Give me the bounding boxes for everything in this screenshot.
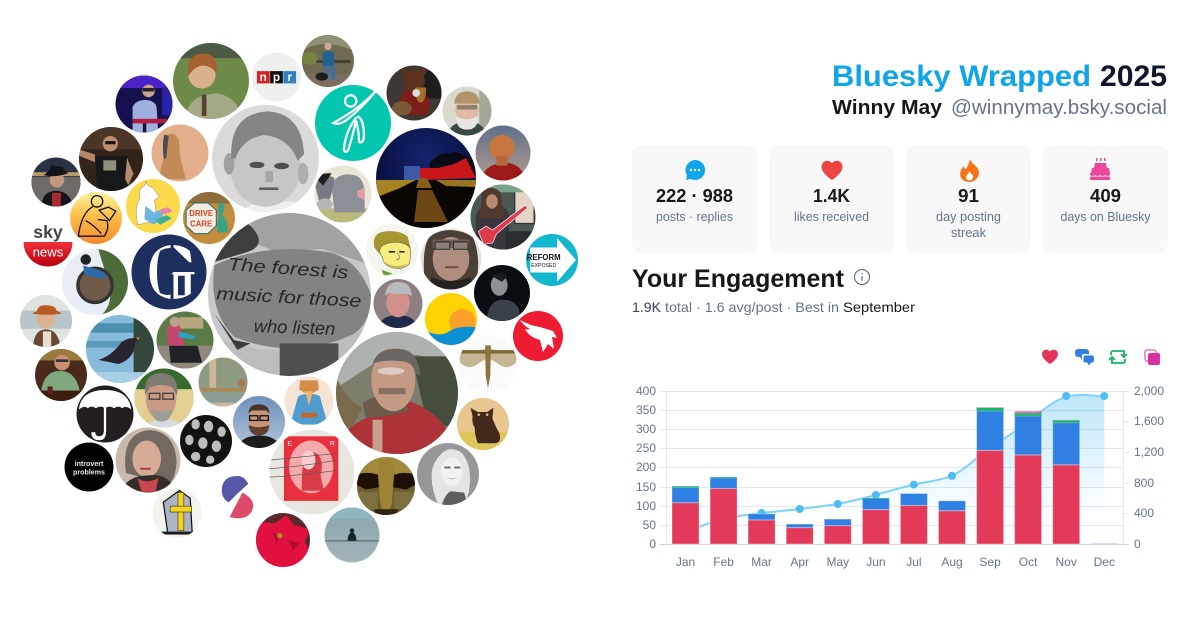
left axis labels: 50 [643, 518, 656, 532]
avatar: Queen Elizabeth red postage stamp: R [330, 441, 335, 448]
right axis labels: 400 [1134, 506, 1154, 520]
avatar: orange cat in kimono [284, 376, 334, 426]
month labels: Mar [751, 555, 772, 569]
left axis labels: 350 [636, 403, 656, 417]
avatar: Introvert Problems logo: problems [73, 468, 105, 476]
avatar: Sky News logo: news [33, 245, 64, 260]
engagement chart [636, 384, 1164, 569]
avatar: person in ornate room [198, 358, 248, 406]
avatar cluster [20, 35, 578, 567]
engagement summary: September [843, 299, 915, 315]
panel: days on Bluesky [1043, 145, 1168, 253]
icon: quotes [1145, 350, 1160, 365]
avatar: NPR logo [252, 52, 301, 102]
left axis labels: 300 [636, 422, 656, 436]
left axis labels: 400 [636, 384, 656, 398]
month labels: Sep [979, 555, 1001, 569]
icon: likes [1042, 350, 1058, 364]
user name and handle: @winnymay.bsky.social [951, 97, 1167, 119]
avatar: Sky News logo: sky [33, 222, 63, 242]
avatar: man looking up in red jacket [336, 332, 458, 454]
icon: birthday cake [1090, 158, 1110, 180]
right axis labels: 0 [1134, 537, 1141, 551]
month labels: Oct [1019, 555, 1038, 569]
month labels: Jun [866, 555, 886, 569]
avatar: red castle at night with lights [376, 128, 476, 228]
month labels: May [826, 555, 849, 569]
month labels: Apr [790, 555, 809, 569]
avatar: Queen Elizabeth red postage stamp: E [287, 441, 292, 448]
avatar: man in cowboy hat [32, 158, 80, 206]
title: Bluesky Wrapped [832, 60, 1091, 93]
avatar: man in black t-shirt [79, 127, 143, 191]
avatar: reader silhouette on orange [70, 192, 122, 244]
avatar: Independent eagle logo [513, 311, 563, 361]
avatar: teal dancer logo [315, 85, 391, 161]
right axis labels: 1,600 [1134, 414, 1164, 428]
avatar: Queen Elizabeth red postage stamp [270, 430, 354, 514]
header [832, 60, 1167, 119]
user name and handle [832, 97, 1167, 119]
avatar: person at keyboard [116, 76, 172, 132]
avatar: black and white group photo [180, 415, 232, 467]
avatar: Eeyore [314, 166, 372, 222]
panel: likes received: likes received [794, 209, 869, 224]
left axis labels: 100 [636, 499, 656, 513]
engagement summary [632, 299, 915, 315]
avatar: Introvert Problems logo [64, 442, 114, 492]
avatar: cartoon yellow face [366, 224, 418, 276]
avatar: woman on mobility scooter [156, 312, 214, 368]
panel: days on Bluesky: 409 [1090, 186, 1121, 206]
left axis labels: 0 [649, 537, 656, 551]
avatar: swimmer at sea [324, 508, 380, 562]
avatar: Drive to Care sign [183, 192, 235, 244]
panel: days on Bluesky: days on Bluesky [1060, 209, 1151, 224]
icon: info [854, 270, 870, 284]
avatar: Drive to Care sign: CARE [190, 219, 212, 228]
avatar: Reform Exposed logo: REFORM [527, 253, 561, 262]
avatar: Drive to Care sign: DRIVE [189, 209, 213, 218]
avatar: grey haired man selfie [374, 279, 422, 328]
month labels: Dec [1094, 555, 1115, 569]
avatar: NPR logo: r [287, 71, 292, 84]
icon: reposts [1109, 351, 1127, 363]
month labels: Jul [906, 555, 922, 569]
avatar: big stone with carved text [208, 213, 371, 376]
month labels: Feb [713, 555, 734, 569]
right axis labels [1134, 384, 1164, 551]
avatar: guitarist [470, 184, 536, 250]
avatar: man with dark glasses and beard [233, 396, 285, 448]
panel: day posting streak: day posting [936, 209, 1001, 224]
title: 2025 [1100, 60, 1167, 93]
avatar: man on forest bench [301, 35, 354, 87]
avatar: NPR logo: p [273, 71, 280, 84]
avatar: umbrella logo [76, 386, 134, 442]
avatar: big stone with carved text: who listen [254, 316, 336, 339]
stacked bars [672, 407, 1118, 544]
user name and handle: Winny May [832, 97, 943, 119]
avatar: yellow sun and wave logo [425, 293, 477, 345]
avatar: Moomin reading [126, 179, 180, 233]
avatar: bearded man with cap [442, 86, 492, 136]
month labels: Aug [941, 555, 963, 569]
avatar: bald man in red [476, 126, 530, 180]
panel: likes received [769, 145, 894, 253]
left axis labels: 150 [636, 480, 656, 494]
avatar: teddy bear with glass [386, 66, 442, 120]
avatar: red poinsettia [256, 513, 310, 567]
avatar: man with glasses close-up [420, 228, 482, 290]
heading: Your Engagement: Your Engagement [632, 265, 845, 293]
right axis labels: 1,200 [1134, 445, 1164, 459]
avatar: big stone with carved text: The forest is [227, 254, 349, 282]
icon: chat bubble [686, 160, 705, 180]
avatar: Reform Exposed logo: EXPOSED [531, 263, 556, 269]
avatar: man in green jumper at pub [35, 349, 87, 401]
engagement summary: 1.9K [632, 299, 662, 315]
avatar: big stone with carved text: music for those [216, 283, 362, 311]
avatar: peach dress [152, 124, 208, 182]
month labels: Jan [676, 555, 695, 569]
icon: heart [822, 161, 842, 180]
left axis labels: 250 [636, 441, 656, 455]
engagement summary: total · 1.6 avg/post · Best in [665, 299, 839, 315]
avatar: Introvert Problems logo: introvert [75, 460, 104, 468]
avatar: NPR logo: n [260, 71, 267, 84]
avatar: woman with curly grey hair [116, 428, 180, 492]
avatar: dark moody portrait [474, 265, 530, 321]
avatar: Reform Exposed logo [526, 234, 578, 286]
cumulative area line [686, 392, 1108, 544]
avatar: Sky News logo [24, 225, 72, 266]
month labels [676, 555, 1115, 569]
panel: posts and replies [632, 145, 757, 253]
avatar: man in orange hat [20, 295, 72, 347]
avatar: blackbird on blue bench [86, 315, 154, 383]
avatar: Guardian G logo [132, 234, 206, 310]
right axis labels: 2,000 [1134, 384, 1164, 398]
avatar: big boy portrait [212, 105, 319, 212]
avatar: person with bike wheel [62, 249, 128, 315]
avatar: moth specimen [459, 335, 517, 393]
avatar: mitre with yellow cross [152, 488, 202, 538]
avatar: blue and pink S logo [212, 473, 261, 522]
avatar: older man with glasses and beard [134, 368, 194, 428]
chart legend [1042, 349, 1160, 366]
panel: posts and replies: posts · replies [656, 209, 733, 224]
avatar: black kitten painting [457, 398, 509, 450]
panel: day posting streak: streak [951, 225, 986, 240]
panel: posts and replies: 222 · 988 [656, 186, 733, 206]
icon: flame [960, 159, 979, 182]
left axis labels [636, 384, 656, 551]
icon: replies [1075, 349, 1094, 366]
avatar: blonde woman black and white [417, 443, 479, 505]
month labels: Nov [1056, 555, 1077, 569]
right axis labels: 800 [1134, 476, 1154, 490]
panel: day posting streak [906, 145, 1031, 253]
avatar: boy in green field [173, 43, 249, 119]
panel: likes received: 1.4K [813, 186, 850, 206]
panel: day posting streak: 91 [958, 186, 979, 206]
avatar: gold helmet [357, 457, 415, 515]
left axis labels: 200 [636, 460, 656, 474]
